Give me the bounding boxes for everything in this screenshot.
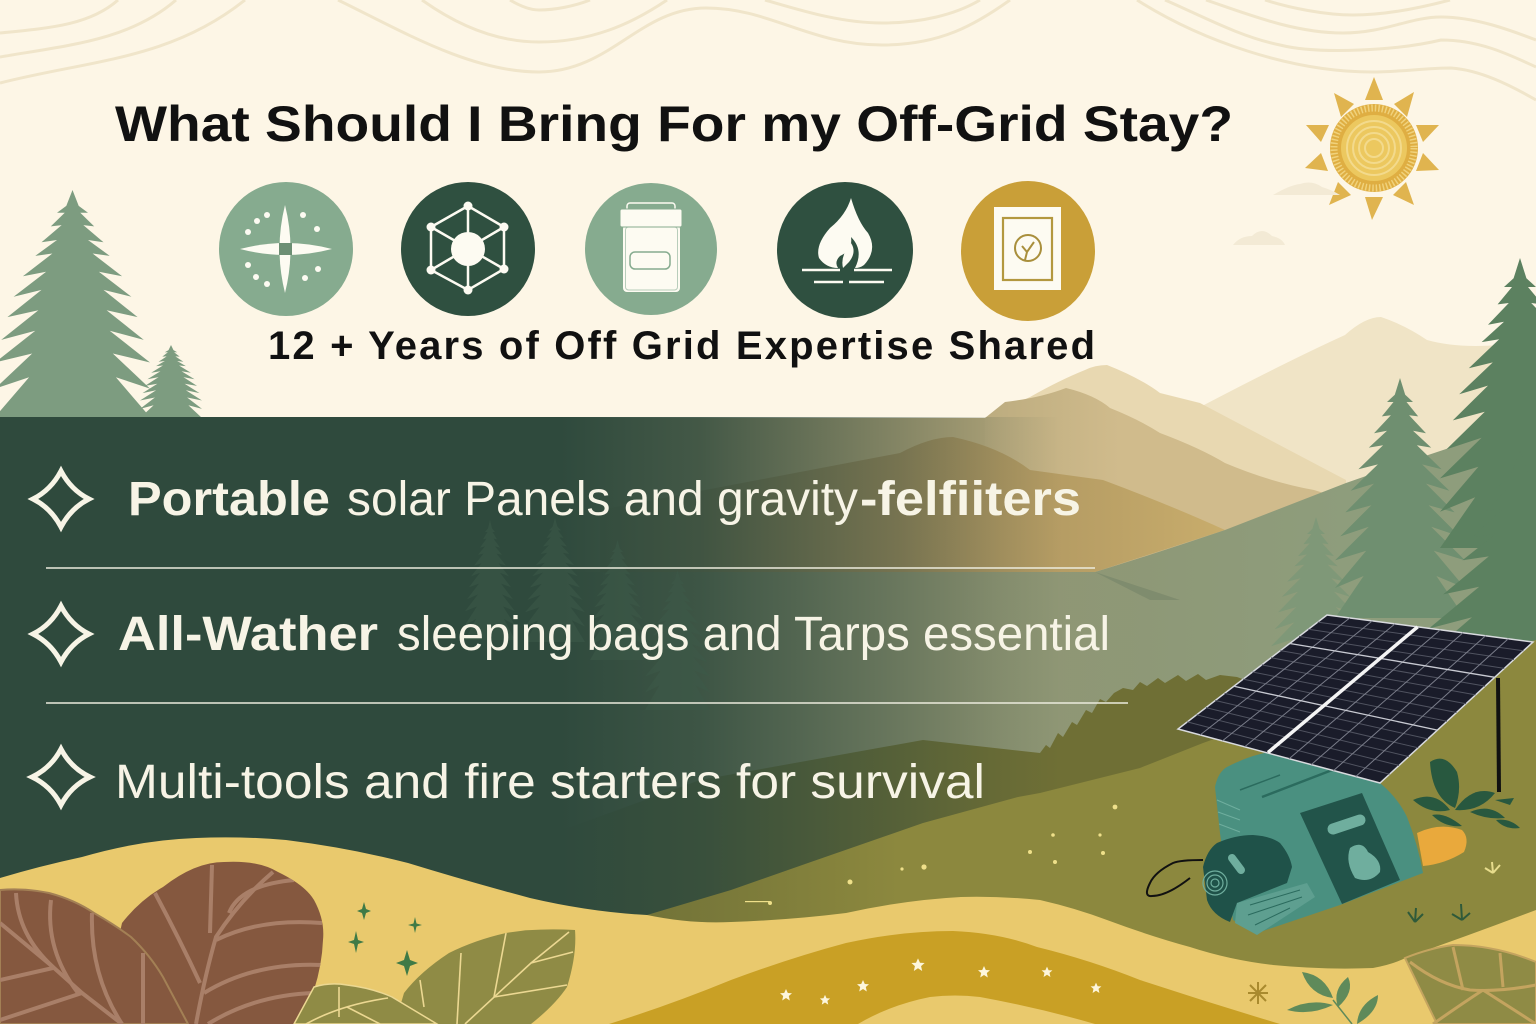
far mountains xyxy=(0,317,1536,1024)
icon: flame xyxy=(777,182,913,318)
left pine trees xyxy=(0,190,202,418)
orange gourd xyxy=(1417,827,1467,866)
textured roll xyxy=(1235,883,1315,935)
bag label pill xyxy=(1333,820,1360,829)
mat swirl xyxy=(1203,871,1227,895)
bag dark label xyxy=(1300,793,1400,904)
bullet 2 xyxy=(33,606,1110,662)
bullet 1 text: solar Panels and gravity xyxy=(347,473,858,526)
bag label blob xyxy=(1348,845,1380,880)
bullet 1 text: Portable xyxy=(128,473,330,526)
mat pill xyxy=(1232,858,1241,870)
right pine trees xyxy=(1271,258,1536,830)
bullet 1 xyxy=(33,471,1081,527)
icon: sun xyxy=(1305,77,1439,220)
icon: network hexagon xyxy=(401,182,535,316)
title: What Should I Bring For my Off-Grid Stay? xyxy=(115,96,1233,152)
brown leaf left xyxy=(0,889,188,1024)
green hill xyxy=(0,420,1536,1000)
sleeping bag xyxy=(1203,752,1423,935)
panel surface xyxy=(1178,615,1533,783)
icon: storage jar xyxy=(585,183,717,315)
plant sprig xyxy=(1287,972,1378,1024)
dark hill shadow xyxy=(1095,572,1180,600)
panel pole xyxy=(1498,678,1499,792)
plant beside bag xyxy=(1413,759,1520,828)
divider 2 xyxy=(46,702,1128,704)
bullet 1 text: -felfiiters xyxy=(860,473,1081,526)
olive meadow xyxy=(647,640,1536,1010)
yellow wave xyxy=(0,837,1536,1024)
icon: certificate xyxy=(961,181,1095,321)
inner yellow wave xyxy=(858,996,1095,1024)
icon: wind turbine xyxy=(219,182,353,316)
bullet 3 text: Multi-tools and fire starters for survival xyxy=(115,756,985,809)
solar panel xyxy=(1178,615,1533,792)
bullet 3 xyxy=(32,749,985,809)
decorative wavy lines xyxy=(0,0,1536,100)
white stars xyxy=(780,958,1101,1005)
meadow yellow specks xyxy=(745,805,1117,905)
bottom-right leaf xyxy=(1405,945,1536,1024)
dark olive hill with grass xyxy=(480,674,1300,1000)
icon: diamond bullet 1 xyxy=(33,471,89,527)
orange star xyxy=(1248,982,1268,1004)
icon: diamond bullet 2 xyxy=(33,606,89,662)
subtitle: 12 + Years of Off Grid Expertise Shared xyxy=(268,324,1095,368)
olive leaf right xyxy=(395,929,575,1024)
bullet 2 text: All-Wather xyxy=(118,608,378,661)
bullet 2 text: sleeping bags and Tarps essential xyxy=(397,608,1110,661)
brown leaf right xyxy=(100,862,323,1024)
olive leaf small xyxy=(294,984,437,1024)
divider 1 xyxy=(46,567,1095,569)
green sparkles xyxy=(348,902,422,976)
grass tufts xyxy=(1408,862,1500,922)
dark green band xyxy=(0,417,1536,1024)
cord xyxy=(1147,860,1203,896)
gold wave xyxy=(609,931,1280,1024)
clouds xyxy=(1233,183,1340,245)
icon: diamond bullet 3 xyxy=(32,749,90,805)
faint forest in band xyxy=(465,518,710,710)
rolled mat xyxy=(1203,835,1292,922)
